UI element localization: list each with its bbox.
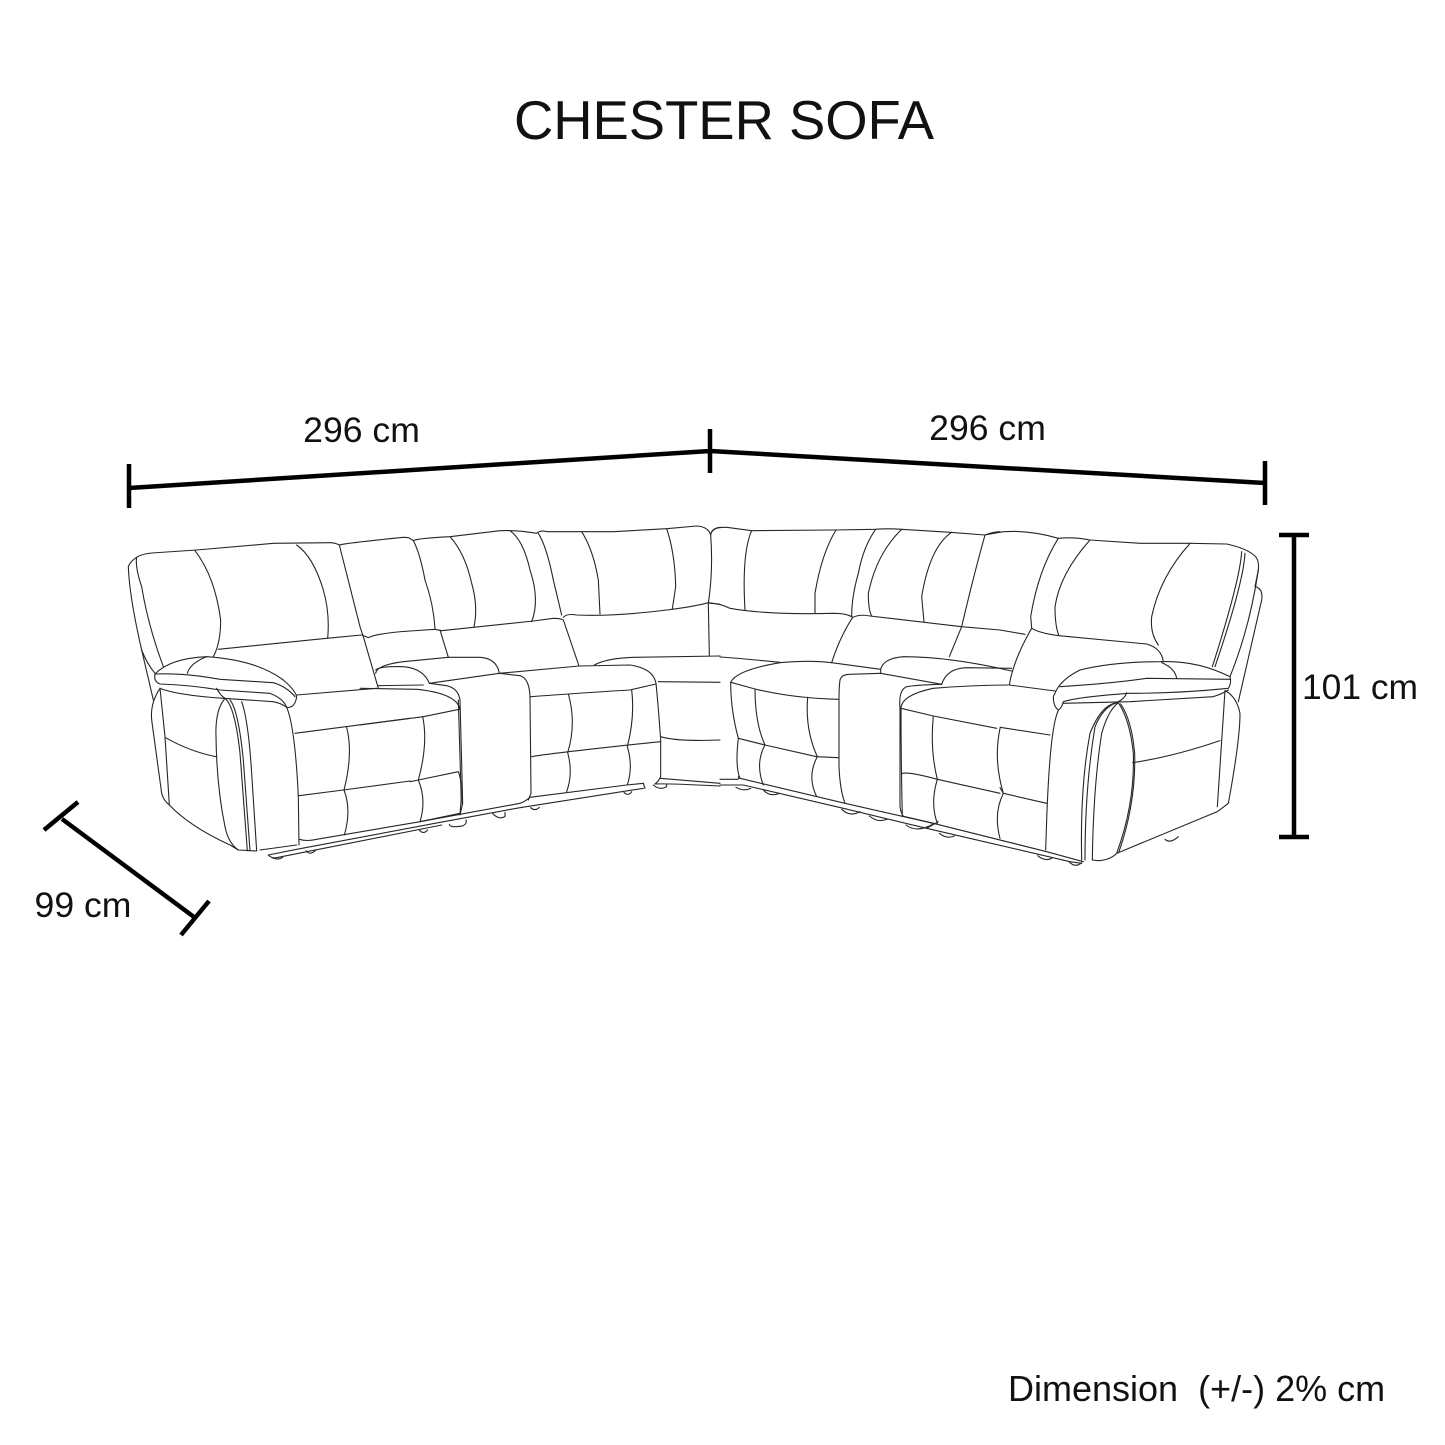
- left centre section with console: [360, 526, 720, 822]
- dimension: height 101 cm: [1279, 535, 1418, 837]
- left recliner section: [128, 537, 410, 851]
- right base rail and feet: [720, 778, 1083, 865]
- footnote: Dimension (+/-) 2% cm: [1008, 1368, 1385, 1409]
- left base rail and feet: [260, 783, 645, 859]
- dimension: left width 296 cm: 296 cm: [303, 410, 420, 450]
- dimension: right width 296 cm: 296 cm: [929, 408, 1046, 448]
- dimension: left width 296 cm: [129, 410, 710, 508]
- dimension: depth 99 cm: 99 cm: [35, 885, 131, 925]
- right centre section with console: [710, 527, 1012, 823]
- sofa line drawing: [128, 526, 1262, 865]
- title: CHESTER SOFA: [514, 90, 935, 151]
- dimension: right width 296 cm: [710, 408, 1265, 505]
- dimension: height 101 cm: 101 cm: [1302, 667, 1418, 707]
- dimension: depth 99 cm: [35, 802, 209, 935]
- right recliner section: [985, 531, 1262, 861]
